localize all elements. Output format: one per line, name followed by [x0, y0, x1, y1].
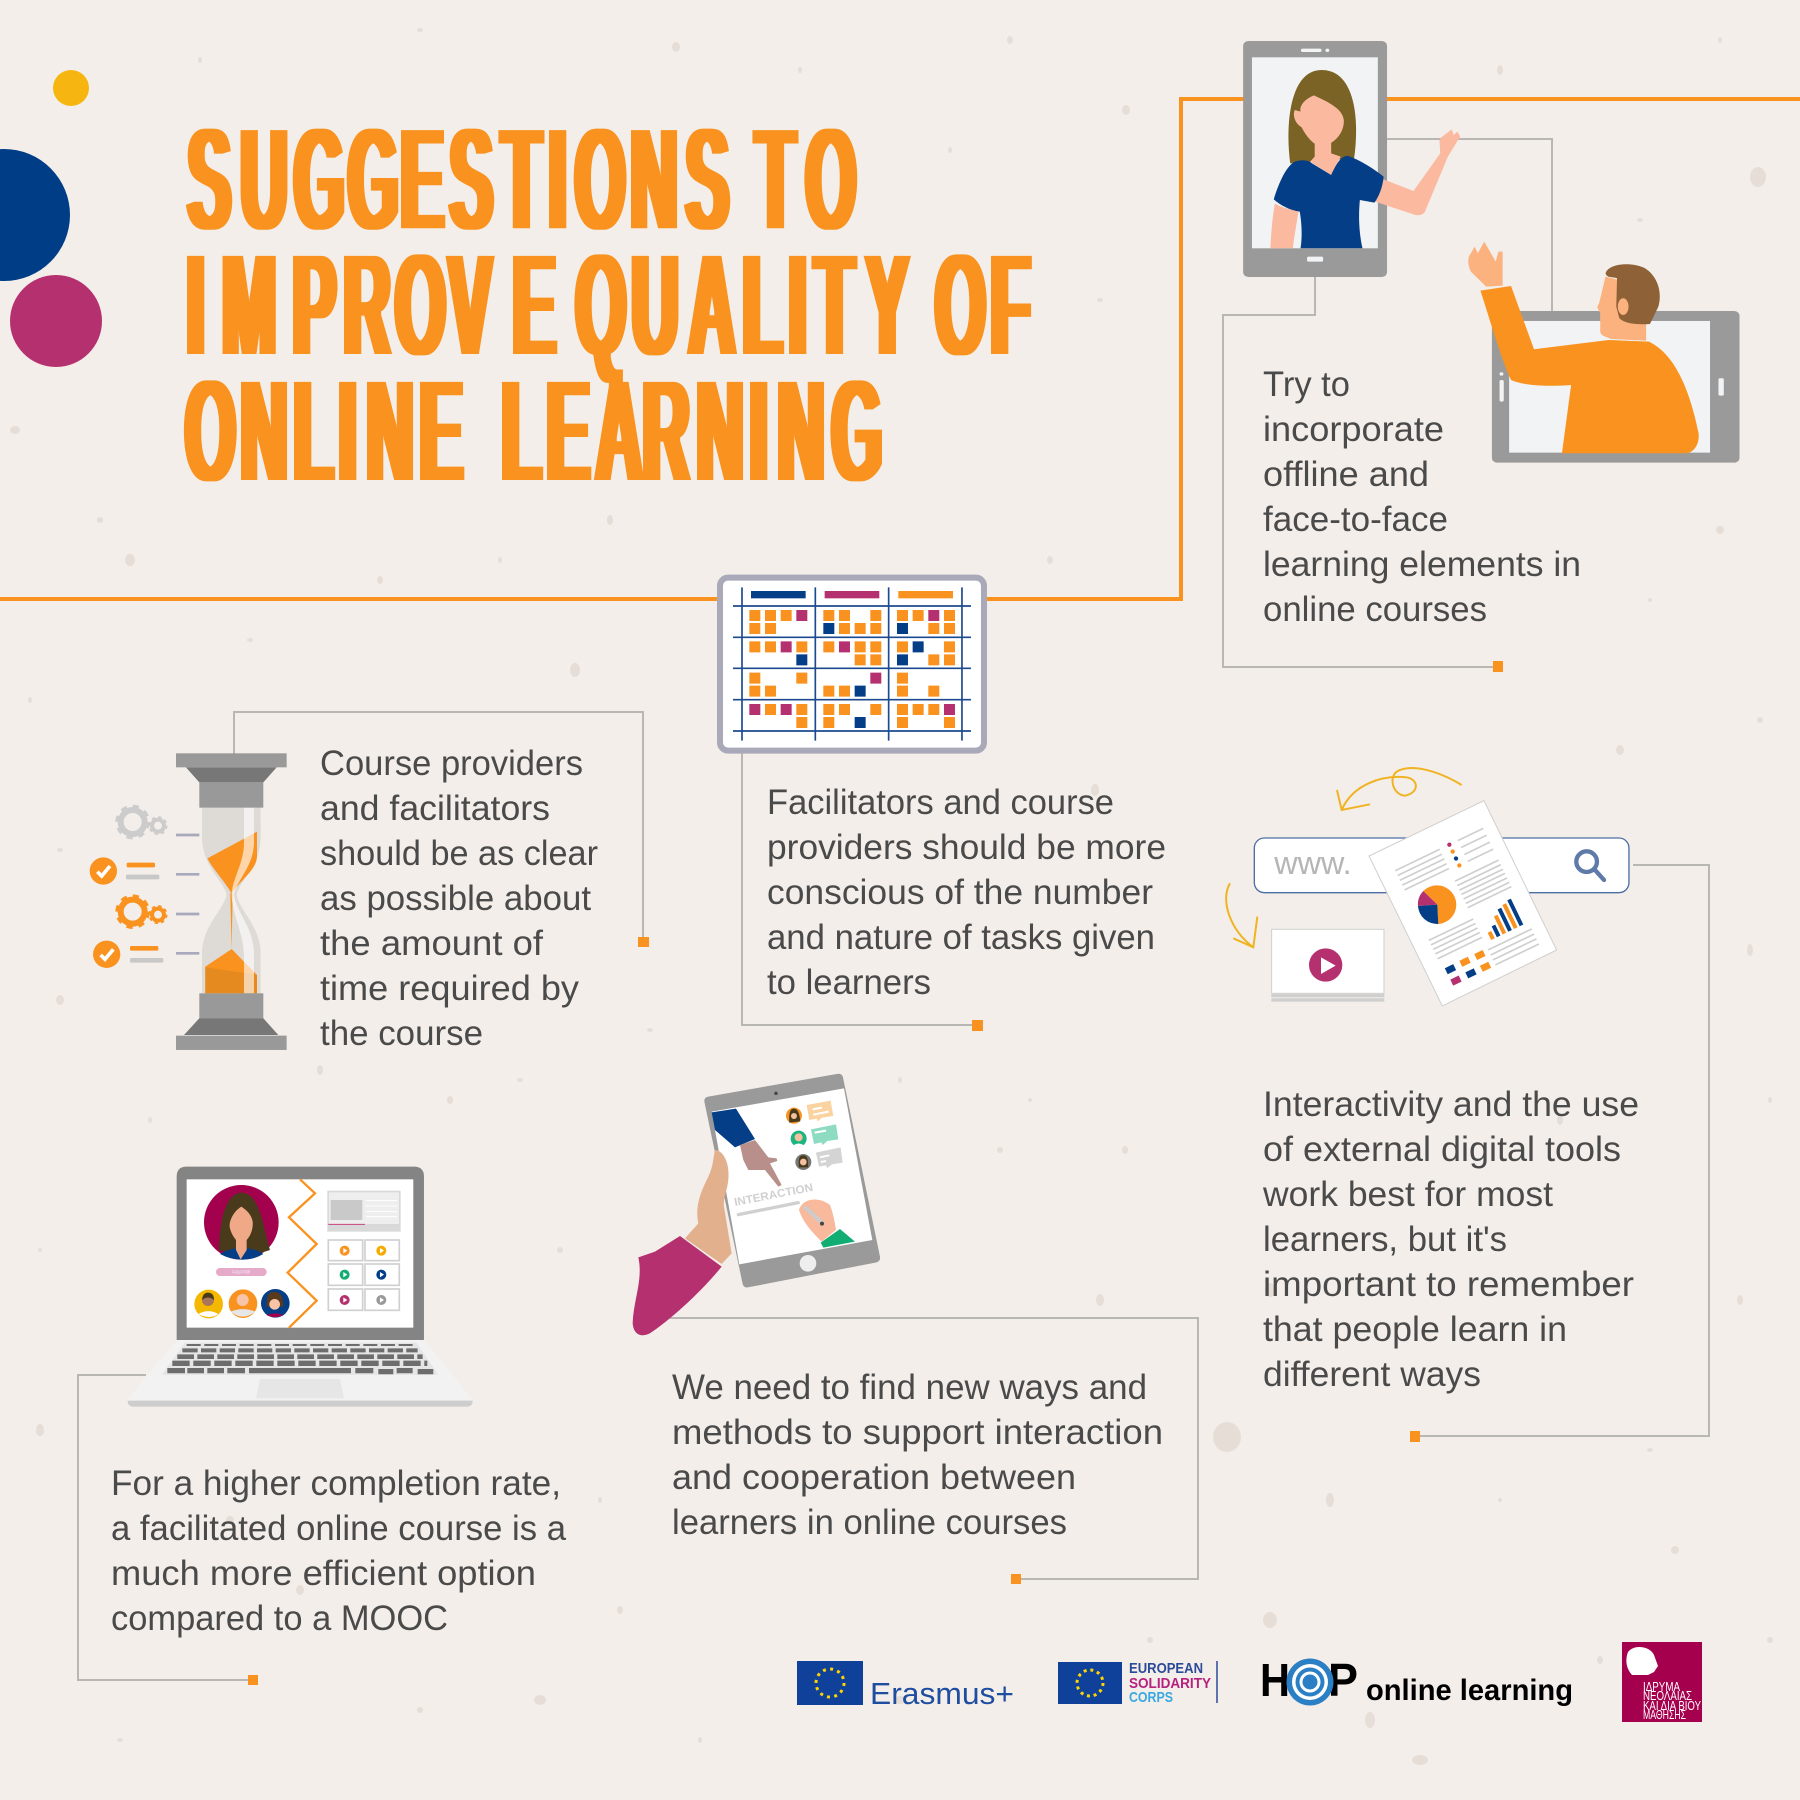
text: offline and face-to-face	[1263, 365, 1581, 629]
logo: European Solidarity Corps: SOLIDARITY	[1129, 1675, 1211, 1692]
text: number and nature of tasks: Facilitators and course	[767, 783, 1114, 822]
text: offline and face-to-face: online courses	[1263, 590, 1487, 629]
logo: Erasmus+	[797, 1661, 1014, 1711]
illustration: search bar, document and video: www.	[1273, 845, 1352, 881]
text: number and nature of tasks: and nature of tasks given	[767, 918, 1155, 957]
text: facilitated online course: compared to a MOOC	[111, 1599, 448, 1638]
logo: youth and lifelong learning foundation: ΙΔΡΥΜΑ	[1643, 1679, 1680, 1694]
text: interactivity and digital tools: important to remember	[1263, 1265, 1634, 1304]
orange connecting line	[0, 99, 1800, 599]
decorative magenta circle	[10, 275, 102, 367]
logo: HOP online learning	[1260, 1654, 1573, 1707]
logo: youth and lifelong learning foundation	[1622, 1642, 1702, 1722]
text: time required: Course providers	[320, 744, 583, 783]
text: number and nature of tasks	[767, 783, 1166, 1002]
decorative yellow circle	[53, 70, 89, 106]
text: number and nature of tasks: to learners	[767, 963, 931, 1002]
connector: tablets	[1387, 139, 1552, 312]
title: IMPROVE QUALITY OF	[187, 223, 1030, 388]
title: ONLINE LEARNING	[185, 349, 882, 514]
title: SUGGESTIONS TO	[188, 98, 856, 262]
text: offline and face-to-face: learning elements in	[1263, 545, 1581, 584]
logo: youth and lifelong learning foundation: ΜΑΘΗΣΗΣ	[1643, 1707, 1686, 1722]
illustration: laptop with facilitated course: FACILITATOR	[232, 1270, 250, 1275]
text: interaction and cooperation: We need to find new ways and	[672, 1368, 1147, 1407]
logo: European Solidarity Corps	[1058, 1660, 1217, 1706]
text: time required: time required by	[320, 969, 580, 1008]
text: interactivity and digital tools: different ways	[1263, 1355, 1481, 1394]
connector: calendar text	[742, 750, 983, 1031]
text: number and nature of tasks: conscious of the number	[767, 873, 1153, 912]
text: time required: the course	[320, 1014, 483, 1053]
text: offline and face-to-face: incorporate	[1263, 410, 1444, 449]
text: interactivity and digital tools: Interactivity and the use	[1263, 1085, 1639, 1124]
text: interaction and cooperation	[672, 1368, 1163, 1542]
text: interactivity and digital tools: that people learn in	[1263, 1310, 1567, 1349]
text: time required: and facilitators	[320, 789, 550, 828]
illustration: task calendar	[720, 578, 984, 751]
text: facilitated online course: much more efficient option	[111, 1554, 536, 1593]
connector: offline learning text	[1223, 277, 1503, 672]
connector: hourglass text	[234, 712, 649, 947]
text: interactivity and digital tools: work best for most	[1262, 1175, 1553, 1214]
illustration: hourglass with gears and checks	[90, 753, 287, 1050]
logo: youth and lifelong learning foundation: ΝΕΟΛΑΙΑΣ	[1643, 1688, 1692, 1703]
illustration: video call on two tablets	[1243, 41, 1740, 463]
text: time required	[320, 744, 598, 1053]
text: number and nature of tasks: providers should be more	[767, 828, 1166, 867]
illustration: hand holding tablet with interaction: INTERACTION	[733, 1182, 814, 1209]
text: offline and face-to-face: face-to-face	[1263, 500, 1448, 539]
text: facilitated online course	[111, 1464, 567, 1638]
logo: HOP online learning: online learning	[1366, 1674, 1573, 1707]
logo: European Solidarity Corps: CORPS	[1129, 1689, 1173, 1706]
illustration: hand holding tablet with interaction	[633, 1074, 880, 1335]
logo: Erasmus+: Erasmus+	[870, 1676, 1014, 1711]
text: offline and face-to-face: offline and	[1263, 455, 1429, 494]
logo: HOP online learning: H	[1260, 1654, 1290, 1706]
text: interactivity and digital tools	[1262, 1085, 1639, 1394]
title	[185, 98, 1030, 514]
text: interaction and cooperation: methods to support interaction	[672, 1413, 1163, 1452]
illustration: search bar, document and video	[1226, 768, 1629, 1006]
text: offline and face-to-face: Try to	[1263, 365, 1350, 404]
text: interactivity and digital tools: of external digital tools	[1263, 1130, 1621, 1169]
text: time required: the amount of	[320, 924, 543, 963]
decorative navy circle	[0, 149, 70, 281]
logo: European Solidarity Corps: EUROPEAN	[1129, 1660, 1203, 1677]
connector: laptop text	[78, 1375, 258, 1685]
text: time required: should be as clear	[320, 834, 598, 873]
connector: interactivity text	[1410, 865, 1709, 1442]
logo: HOP online learning: P	[1328, 1654, 1358, 1706]
text: time required: as possible about	[320, 879, 591, 918]
connector: interaction text	[670, 1318, 1198, 1584]
text: interaction and cooperation: and cooperation between	[672, 1458, 1076, 1497]
text: interactivity and digital tools: learners, but it's	[1263, 1220, 1507, 1259]
logo: youth and lifelong learning foundation: ΚΑΙ ΔΙΑ ΒΙΟΥ	[1643, 1698, 1701, 1713]
text: facilitated online course: For a higher completion rate,	[111, 1464, 561, 1503]
illustration: laptop with facilitated course	[128, 1167, 473, 1407]
text: interaction and cooperation: learners in online courses	[672, 1503, 1067, 1542]
text: facilitated online course: a facilitated online course is a	[111, 1509, 567, 1548]
